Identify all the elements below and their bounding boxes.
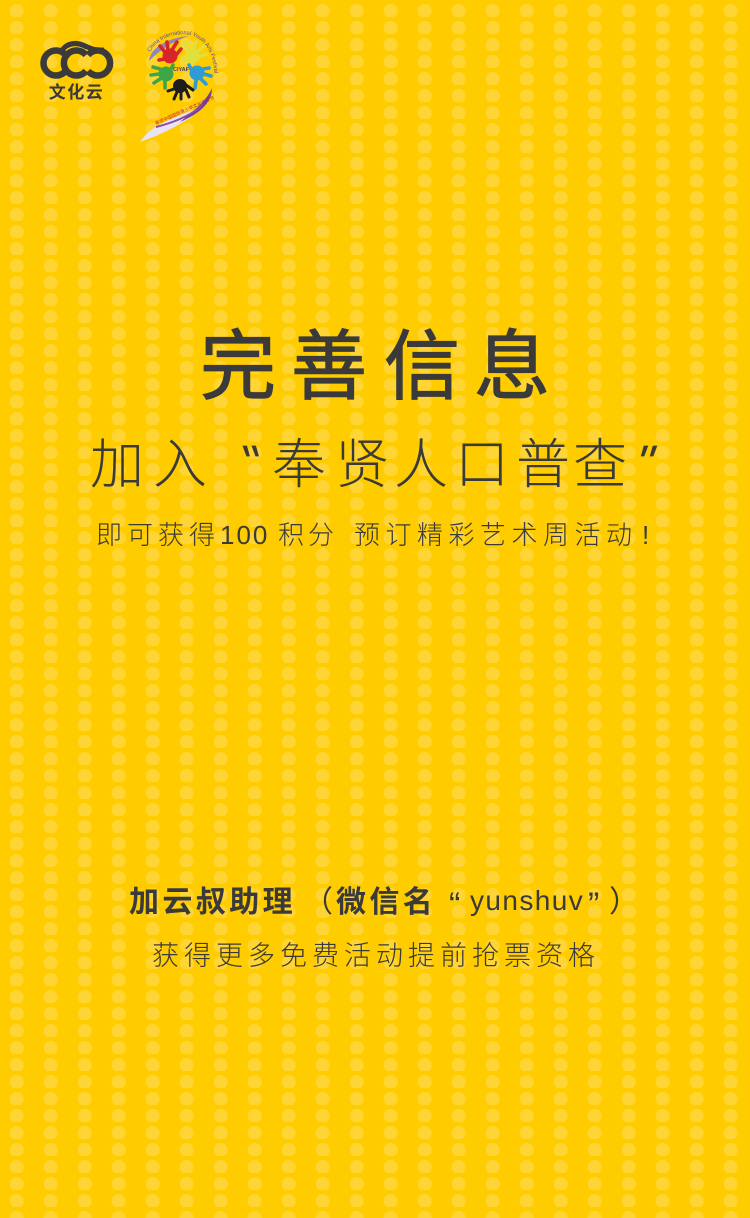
logo: CIYAF festival emblem: CIYAF (173, 67, 190, 73)
text: add assistant: yunshuv (470, 885, 584, 916)
subtitle: join census: 普 (516, 435, 570, 495)
logo: CIYAF festival emblem: 奉贤中国国际青少年文化艺术节 (154, 94, 216, 127)
subtitle: join census: 贤 (335, 435, 389, 495)
title (200, 325, 550, 410)
title: 息 (474, 325, 550, 410)
subtitle: join census: 口 (455, 435, 509, 495)
subtitle: join census (90, 435, 663, 495)
text: add assistant: （ (303, 886, 333, 919)
subtitle: join census: " (237, 435, 273, 491)
text: add assistant: 加云叔助理 (129, 886, 296, 919)
text: points offer: 预订精彩艺术周活动 (354, 520, 638, 550)
logo: CIYAF festival emblem (140, 30, 218, 142)
text: points offer (96, 520, 649, 550)
text: benefit: 获得更多免费活动提前抢票资格 (152, 941, 600, 971)
text: add assistant: ） (609, 886, 639, 919)
logo: CIYAF festival emblem: China International Youth Arts Festival (148, 30, 218, 73)
text: points offer: 即可获得 (96, 520, 220, 550)
text: add assistant (129, 885, 639, 924)
text: add assistant: ” (588, 886, 599, 924)
text: points offer: 100 (220, 520, 269, 550)
text: add assistant: 微信名 (336, 886, 436, 919)
subtitle: join census: 加 (90, 435, 144, 495)
text: points offer: ! (642, 520, 649, 550)
title: 信 (384, 325, 460, 410)
subtitle: join census: 查 (573, 435, 627, 495)
subtitle: join census: 人 (394, 435, 448, 495)
text: add assistant: “ (449, 886, 460, 924)
logo: Wenhuayun cloud: 文化云 (49, 82, 104, 102)
subtitle: join census: 奉 (272, 435, 326, 495)
text: points offer: 积分 (278, 520, 338, 550)
title: 善 (291, 325, 367, 410)
subtitle: join census: 入 (153, 435, 207, 495)
logo: Wenhuayun cloud (40, 40, 114, 102)
title: 完 (200, 325, 276, 410)
subtitle: join census: " (627, 435, 663, 491)
